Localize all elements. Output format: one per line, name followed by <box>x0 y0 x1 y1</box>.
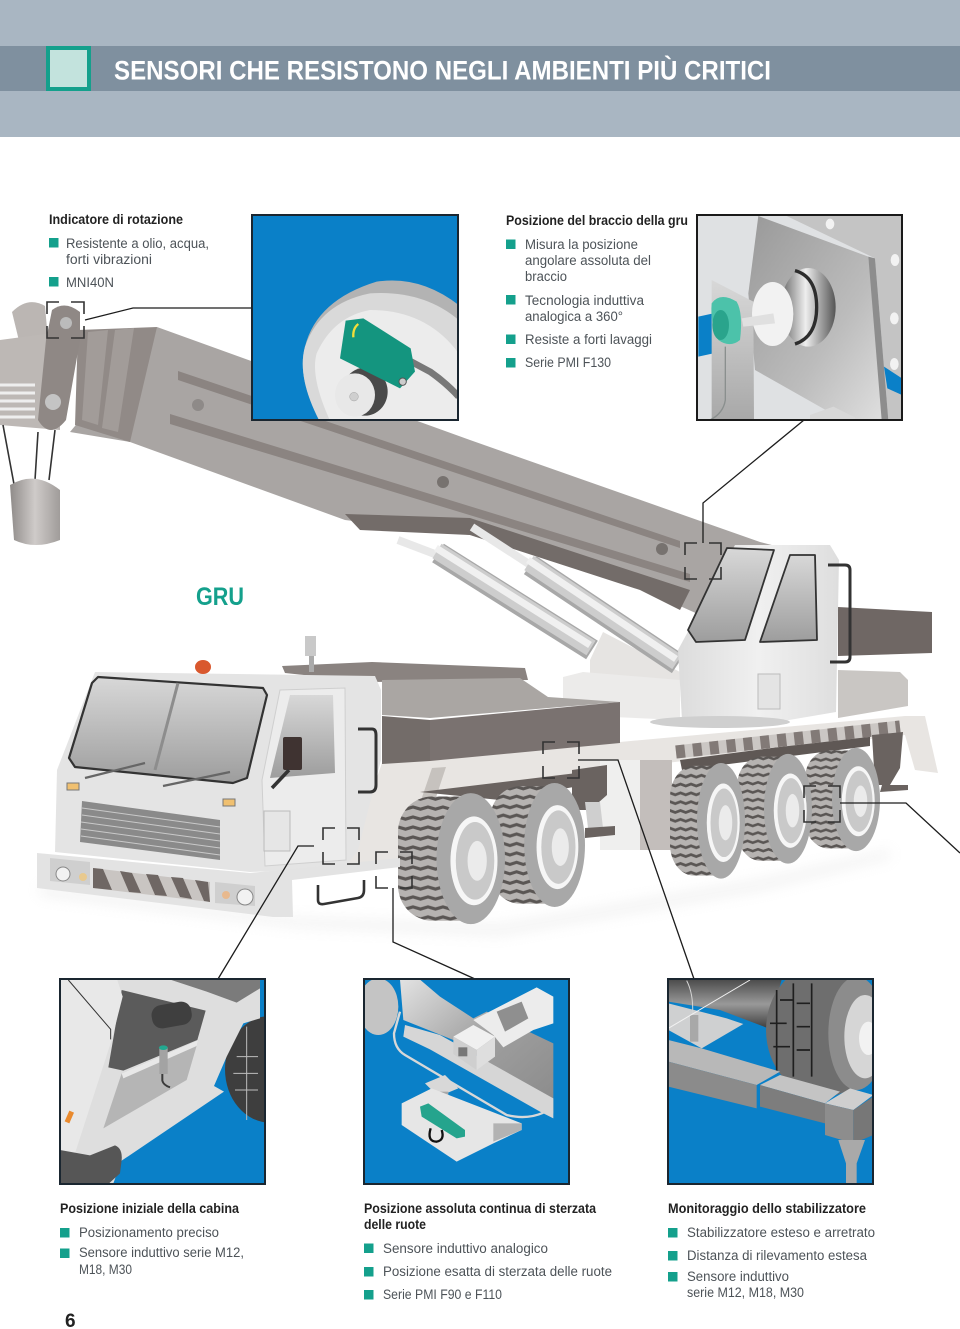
grille <box>80 801 220 860</box>
sensor roller <box>349 368 388 416</box>
bullet list: serie M12, M18, M30 <box>687 1285 804 1300</box>
rubber bumper <box>60 1145 122 1184</box>
sensor cable <box>412 358 457 399</box>
bullet list: Resistente a olio, acqua, <box>66 236 209 251</box>
inductive sensor <box>159 1045 170 1087</box>
title: SENSORI CHE RESISTONO NEGLI AMBIENTI PIÙ CRITICI <box>114 56 771 86</box>
tire <box>225 1016 264 1122</box>
text block: rotation indicator <box>49 212 209 290</box>
hydraulic piston: upper <box>472 527 678 664</box>
crane operator cab <box>650 545 850 728</box>
bullet list: Tecnologia induttiva <box>525 293 644 308</box>
crane boom <box>70 327 830 615</box>
front bumper <box>37 853 400 917</box>
windshield <box>69 677 267 783</box>
rear cargo box <box>282 662 620 764</box>
cab panel <box>60 979 123 1153</box>
heading: Monitoraggio dello stabilizzatore <box>668 1201 866 1216</box>
inset: cab position <box>59 978 266 1185</box>
side window <box>270 695 335 778</box>
heading <box>364 1201 596 1232</box>
bullet list: braccio <box>525 269 567 284</box>
U cable <box>430 1128 443 1142</box>
sensor bracket <box>425 1075 458 1095</box>
rear platform <box>563 632 908 720</box>
panel: header band <box>0 0 960 137</box>
truck tire <box>766 980 872 1096</box>
beam segment <box>668 1040 780 1108</box>
green sensor <box>340 318 415 388</box>
heading: Posizione del braccio della gru <box>506 213 688 228</box>
cube joint <box>453 1025 495 1062</box>
bullet list: Distanza di rilevamento estesa <box>687 1248 867 1263</box>
inset: steering sensor <box>358 978 569 1184</box>
side mirror <box>272 737 302 788</box>
amber lights <box>67 783 235 806</box>
corner block <box>825 1088 873 1143</box>
teal sensor <box>420 1103 465 1138</box>
metal shaft housing <box>742 268 836 347</box>
beacon light <box>195 660 211 674</box>
truck cab <box>55 636 381 872</box>
bullet list: Sensore induttivo <box>687 1269 789 1284</box>
illustration: crane <box>0 302 938 935</box>
text block: stabilizer monitoring <box>668 1201 875 1300</box>
frame <box>60 979 260 1183</box>
bullet list: MNI40N <box>66 275 114 290</box>
text block: steering position <box>364 1201 612 1302</box>
bullet list: angolare assoluta del <box>525 253 651 268</box>
open housing box <box>402 1088 522 1162</box>
bullet list <box>506 237 652 370</box>
bullet list: Serie PMI F130 <box>525 355 611 370</box>
bullet list: M18, M30 <box>79 1262 132 1277</box>
bullet list: Resiste a forti lavaggi <box>525 332 652 347</box>
bullet list: Misura la posizione <box>525 237 638 252</box>
bullet list: forti vibrazioni <box>66 252 152 267</box>
bullet list <box>364 1241 612 1302</box>
truck deck <box>345 716 938 868</box>
inset: rotation sensor <box>252 215 459 421</box>
cab windows <box>688 548 774 642</box>
bullet list: Posizione esatta di sterzata delle ruote <box>383 1264 612 1279</box>
marker lamp <box>65 1111 74 1123</box>
inductive sensor <box>687 981 698 1042</box>
bullet list: Sensore induttivo serie M12, <box>79 1245 244 1260</box>
steering arm <box>400 980 553 1113</box>
callout lines <box>85 308 960 979</box>
hydraulic piston: lower <box>398 540 592 650</box>
bullet list <box>49 236 209 290</box>
heading: Indicatore di rotazione <box>49 212 183 227</box>
sensor cable <box>710 347 725 420</box>
heading: Posizione assoluta continua di sterzata <box>364 1201 596 1216</box>
stabilizer legs <box>572 732 908 838</box>
bullet list <box>668 1225 875 1300</box>
bullet list: Stabilizzatore esteso e arretrato <box>687 1225 875 1240</box>
text block: boom position <box>506 213 688 370</box>
inset: boom angle sensor <box>697 215 902 420</box>
heading: Posizione iniziale della cabina <box>60 1201 239 1216</box>
clevis <box>473 987 553 1047</box>
sliding segment <box>760 1075 840 1123</box>
teal angle sensor <box>711 297 741 344</box>
crane boom head and pulley <box>0 302 157 545</box>
text block: cab home position <box>60 1201 244 1277</box>
cab handle <box>828 565 850 662</box>
counterweight <box>838 607 932 656</box>
bullet list: Posizionamento preciso <box>79 1225 219 1240</box>
hose <box>394 1012 543 1117</box>
ground shadow <box>40 850 890 935</box>
cab side handle <box>358 729 376 792</box>
exhaust stack <box>305 636 316 672</box>
wheels <box>398 748 880 924</box>
heading: delle ruote <box>364 1217 426 1232</box>
truck step <box>318 880 364 904</box>
stabilizer leg <box>838 1140 865 1184</box>
back tube <box>668 980 782 1028</box>
inset: stabilizer monitor <box>667 978 874 1185</box>
hydraulic cylinder <box>403 1025 553 1118</box>
heading: GRU: GRU <box>196 583 244 611</box>
target brackets <box>47 302 840 888</box>
bullet list: Serie PMI F90 e F110 <box>383 1287 502 1302</box>
icon: teal square <box>48 48 89 89</box>
mounting bracket <box>712 280 754 420</box>
bullet list: Sensore induttivo analogico <box>383 1241 548 1256</box>
bullet list <box>60 1225 244 1277</box>
bullet list: analogica a 360° <box>525 309 623 324</box>
